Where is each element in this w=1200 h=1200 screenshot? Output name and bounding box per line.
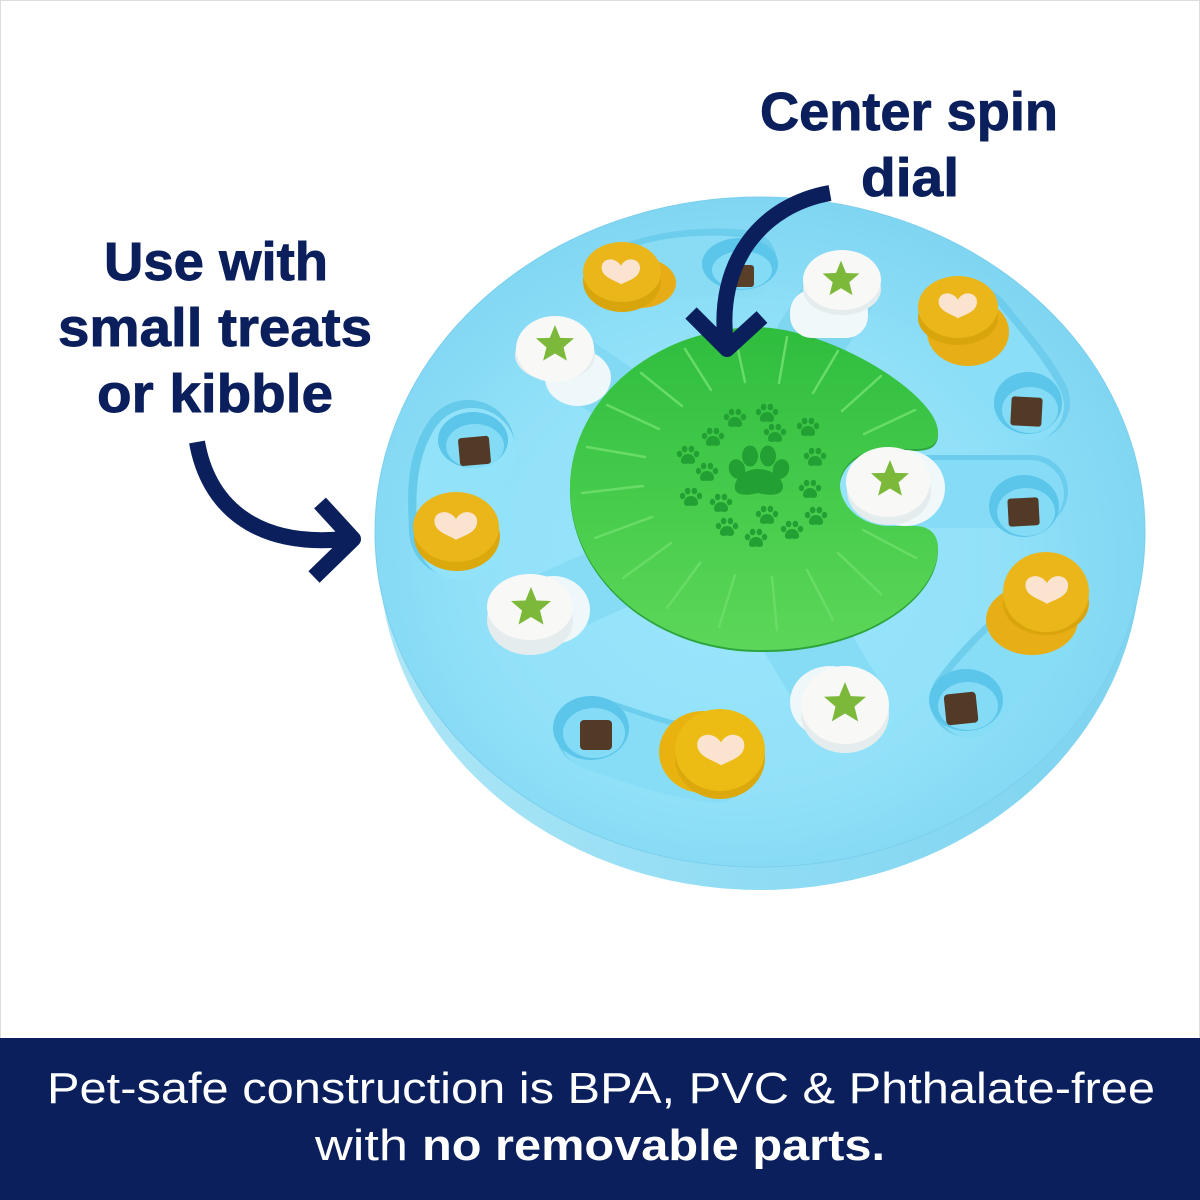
yellow heart disc: upper right: [918, 276, 1009, 366]
well: top: [702, 238, 778, 290]
product: puzzle toy: [375, 197, 1145, 890]
toy base plate: [379, 218, 1141, 890]
yellow heart disc: bottom: [659, 709, 765, 799]
footer text: no removable parts.: [422, 1121, 885, 1170]
toy top surface: [375, 197, 1145, 867]
white star disc: right, in dial notch: [846, 447, 945, 526]
well: lower right: [929, 669, 1003, 731]
callout: use with small treats: Use with: [104, 232, 328, 292]
well: left: [438, 412, 508, 468]
callout: use with small treats: or kibble: [97, 364, 333, 424]
callout: use with small treats: [58, 232, 372, 424]
footer text: with: [314, 1121, 408, 1170]
treat wells and kibble: [438, 238, 1062, 760]
arrow: to center dial: [691, 193, 830, 349]
well: right: [989, 475, 1059, 537]
footer banner: [0, 1038, 1200, 1200]
yellow heart disc: right: [986, 552, 1089, 655]
yellow heart disc: top: [583, 242, 676, 312]
callout: use with small treats: small treats: [58, 298, 372, 358]
yellow heart disc: left: [413, 492, 500, 571]
green center spin dial: [570, 327, 938, 652]
white star disc: bottom: [790, 666, 889, 753]
dial ridges: [582, 337, 916, 630]
white star disc: upper left: [515, 316, 611, 406]
well: bottom left: [553, 696, 629, 760]
white star disc: lower left: [487, 574, 590, 655]
white star disc: top right: [790, 250, 881, 338]
callout: center spin dial: [760, 82, 1058, 208]
callout: center spin dial: Center spin: [760, 82, 1058, 142]
dial paw prints: [677, 404, 827, 547]
well: upper right: [994, 372, 1062, 434]
footer text: [47, 1064, 1155, 1170]
arrow: to toy edge: [197, 442, 353, 577]
sliding tracks: [455, 260, 1044, 769]
footer text: Pet-safe construction is BPA, PVC & Phthalate-free: [47, 1064, 1155, 1113]
callout: center spin dial: dial: [861, 148, 959, 208]
